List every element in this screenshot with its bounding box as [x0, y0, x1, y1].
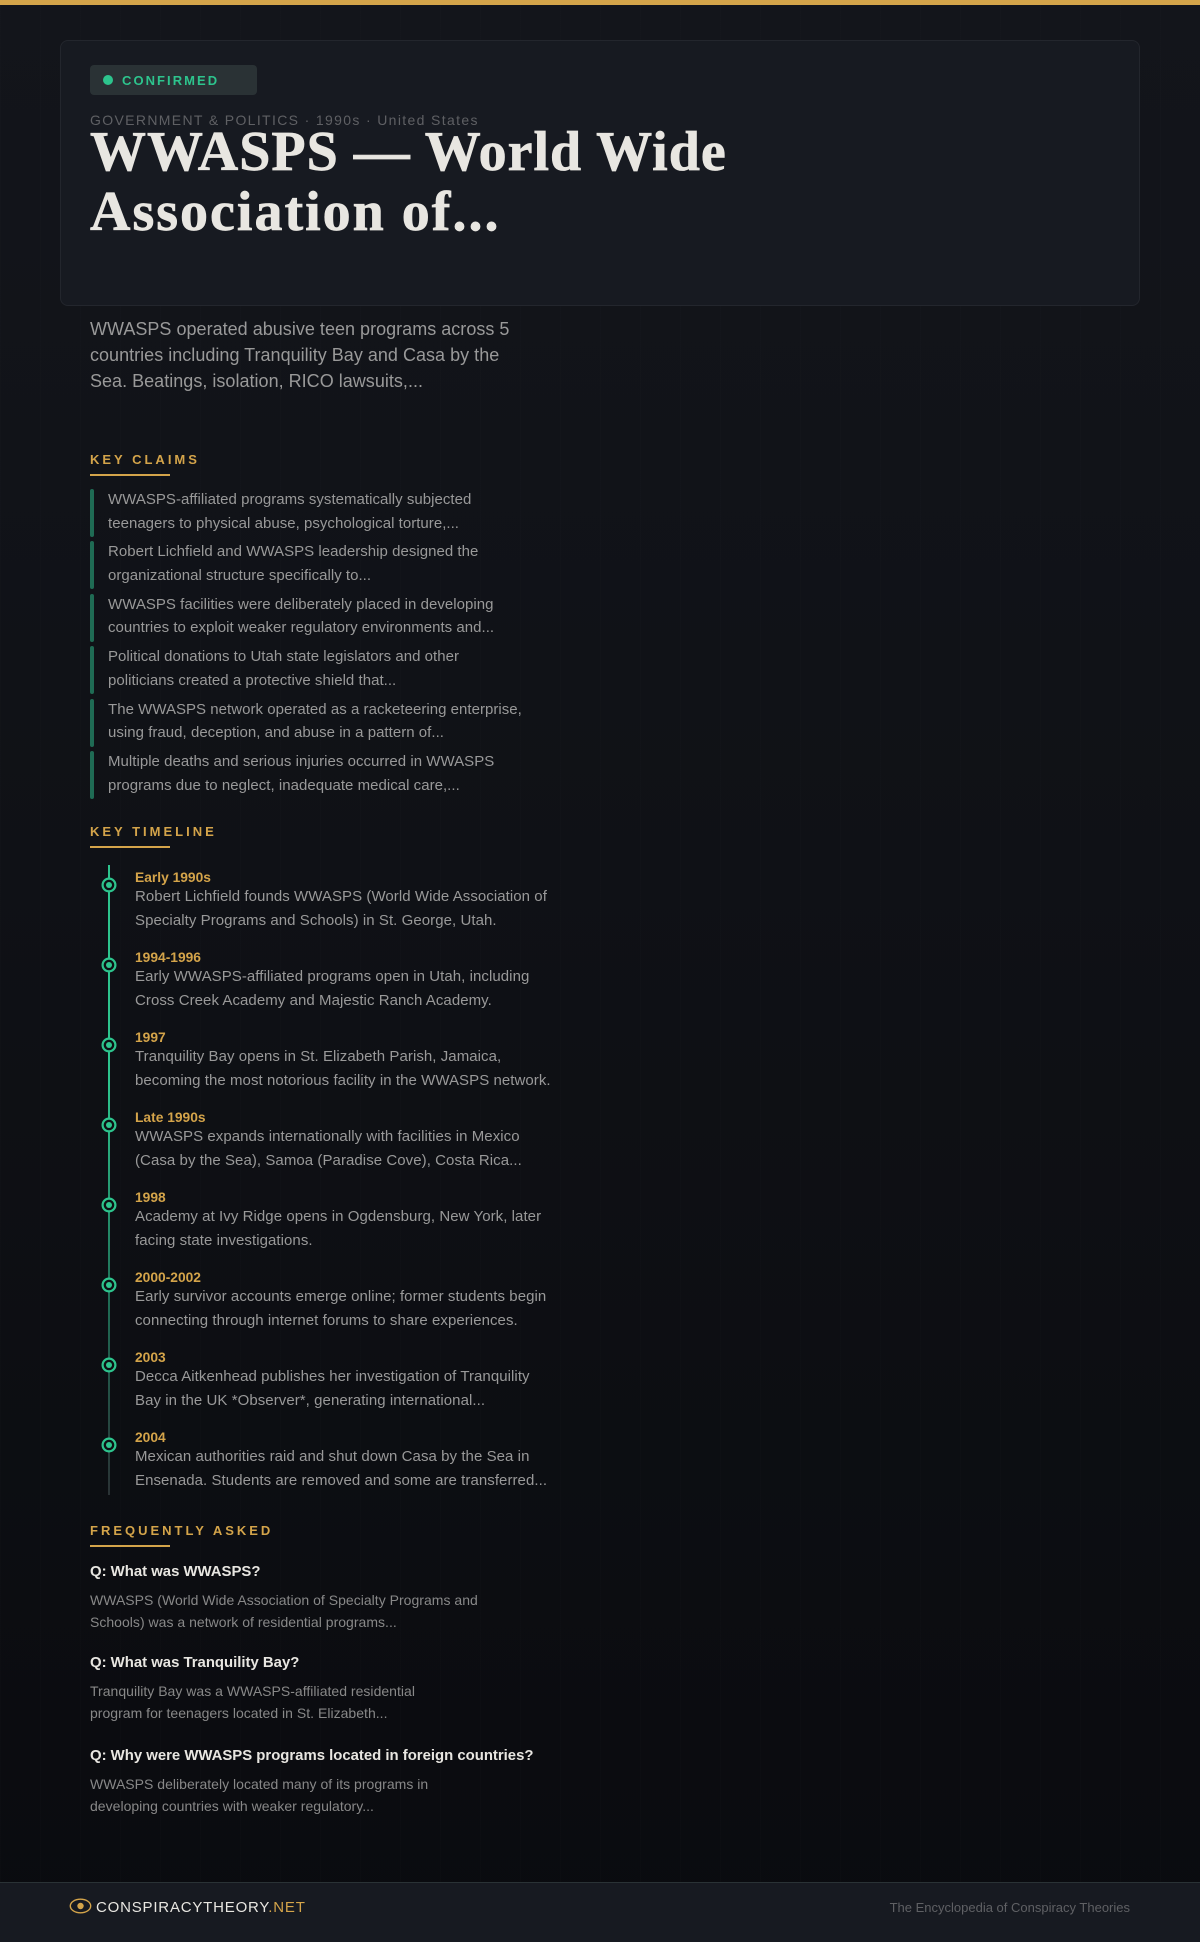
- lede paragraph: [90, 319, 509, 391]
- event: Late 1990s: WWASPS expands internationally with facilities in Mexico: [135, 1128, 520, 1144]
- event: 2004: Ensenada. Students are removed and some are transferred...: [135, 1472, 547, 1488]
- FAQ 2: Q: What was Tranquility Bay?: [90, 1655, 299, 1671]
- claim 4: [90, 646, 459, 694]
- FAQ 2: Tranquility Bay was a WWASPS-affiliated residential: [90, 1683, 415, 1699]
- panel: timeline: [102, 865, 551, 1495]
- event: 2003: Decca Aitkenhead publishes her investigation of Tranquility: [135, 1368, 530, 1384]
- event: 2000-2002: connecting through internet forums to share experiences.: [135, 1312, 518, 1328]
- event: 2003: [102, 1350, 530, 1408]
- FAQ 1: Schools) was a network of residential programs...: [90, 1614, 397, 1630]
- FAQ 2: program for teenagers located in St. Elizabeth...: [90, 1705, 387, 1721]
- event: Early 1990s: Early 1990s: [135, 870, 211, 884]
- badge label: CONFIRMED: [122, 73, 219, 88]
- claim 2: organizational structure specifically to...: [108, 567, 371, 584]
- event: 2003: 2003: [135, 1350, 166, 1364]
- claim 6: [90, 751, 494, 799]
- footer brand: CONSPIRACYTHEORY.NET: [96, 1899, 306, 1916]
- claim 3: WWASPS facilities were deliberately placed in developing: [108, 596, 493, 613]
- event: 1994-1996: [102, 950, 529, 1008]
- claim 3: countries to exploit weaker regulatory environments and...: [108, 619, 494, 636]
- title: [90, 121, 727, 242]
- footer tagline: The Encyclopedia of Conspiracy Theories: [890, 1900, 1130, 1915]
- top accent bar: [0, 0, 1200, 5]
- event: 2003: Bay in the UK *Observer*, generating international...: [135, 1392, 485, 1408]
- claim 2: [90, 541, 478, 589]
- event: Late 1990s: (Casa by the Sea), Samoa (Paradise Cove), Costa Rica...: [135, 1152, 522, 1168]
- event: 2000-2002: 2000-2002: [135, 1270, 201, 1284]
- FAQ 1: WWASPS (World Wide Association of Specialty Programs and: [90, 1592, 478, 1608]
- badge: confirmed: [90, 65, 257, 95]
- claim 1: [90, 489, 471, 537]
- title: Association of...: [90, 180, 500, 242]
- FAQ 3: WWASPS deliberately located many of its programs in: [90, 1776, 428, 1792]
- icon: eye logo: [70, 1898, 92, 1914]
- claim 5: [90, 699, 522, 747]
- FAQ 3: Q: Why were WWASPS programs located in foreign countries?: [90, 1748, 533, 1764]
- FAQ 3: [90, 1748, 533, 1814]
- claim 5: using fraud, deception, and abuse in a pattern of...: [108, 724, 444, 741]
- event: 1994-1996: Early WWASPS-affiliated programs open in Utah, including: [135, 968, 529, 984]
- event: 2004: Mexican authorities raid and shut down Casa by the Sea in: [135, 1448, 529, 1464]
- event: Late 1990s: Late 1990s: [135, 1110, 206, 1124]
- claim 4: politicians created a protective shield that...: [108, 672, 396, 689]
- event: 1998: [102, 1190, 541, 1248]
- claim 4: Political donations to Utah state legislators and other: [108, 648, 459, 665]
- event: 2004: [102, 1430, 547, 1488]
- icon: status dot: [103, 75, 113, 85]
- heading: key timeline: KEY TIMELINE: [90, 824, 217, 839]
- panel: header card: [60, 40, 1140, 306]
- event: 2004: 2004: [135, 1430, 166, 1444]
- event: 1998: Academy at Ivy Ridge opens in Ogdensburg, New York, later: [135, 1208, 541, 1224]
- heading: frequently asked: FREQUENTLY ASKED: [90, 1523, 273, 1538]
- claim 1: teenagers to physical abuse, psychological torture,...: [108, 514, 459, 532]
- event: Early 1990s: Specialty Programs and Schools) in St. George, Utah.: [135, 912, 497, 928]
- event: Early 1990s: Robert Lichfield founds WWASPS (World Wide Association of: [135, 888, 547, 904]
- claim 1: WWASPS-affiliated programs systematically subjected: [108, 491, 471, 508]
- timeline line: [108, 865, 110, 1495]
- FAQ 1: Q: What was WWASPS?: [90, 1564, 260, 1580]
- event: 1998: 1998: [135, 1190, 166, 1204]
- category line: GOVERNMENT & POLITICS · 1990s · United States: [90, 112, 479, 128]
- footer: [0, 1882, 1200, 1942]
- claim 2: Robert Lichfield and WWASPS leadership designed the: [108, 543, 478, 560]
- event: 1997: Tranquility Bay opens in St. Elizabeth Parish, Jamaica,: [135, 1048, 501, 1064]
- panel: FAQ list: [90, 1564, 533, 1814]
- event: 1998: facing state investigations.: [135, 1232, 313, 1248]
- claim 6: Multiple deaths and serious injuries occurred in WWASPS: [108, 753, 494, 770]
- event: 2000-2002: Early survivor accounts emerge online; former students begin: [135, 1288, 546, 1304]
- event: Late 1990s: [102, 1110, 522, 1168]
- FAQ 1: [90, 1564, 478, 1630]
- event: 1994-1996: 1994-1996: [135, 950, 201, 964]
- event: 1997: [102, 1030, 551, 1088]
- lede paragraph: Sea. Beatings, isolation, RICO lawsuits,...: [90, 371, 423, 391]
- event: 1997: becoming the most notorious facility in the WWASPS network.: [135, 1072, 551, 1088]
- claim 6: programs due to neglect, inadequate medical care,...: [108, 776, 460, 794]
- claim 3: [90, 594, 494, 642]
- FAQ 3: developing countries with weaker regulatory...: [90, 1798, 374, 1814]
- lede paragraph: countries including Tranquility Bay and Casa by the: [90, 345, 499, 365]
- panel: claims list: [90, 489, 522, 799]
- lede paragraph: WWASPS operated abusive teen programs across 5: [90, 319, 509, 339]
- event: 1997: 1997: [135, 1030, 166, 1044]
- claim 5: The WWASPS network operated as a racketeering enterprise,: [108, 701, 522, 718]
- event: Early 1990s: [102, 870, 547, 928]
- event: 2000-2002: [102, 1270, 546, 1328]
- event: 1994-1996: Cross Creek Academy and Majestic Ranch Academy.: [135, 992, 492, 1008]
- FAQ 2: [90, 1655, 415, 1721]
- title: WWASPS — World Wide: [90, 121, 727, 183]
- heading: key claims: KEY CLAIMS: [90, 452, 200, 467]
